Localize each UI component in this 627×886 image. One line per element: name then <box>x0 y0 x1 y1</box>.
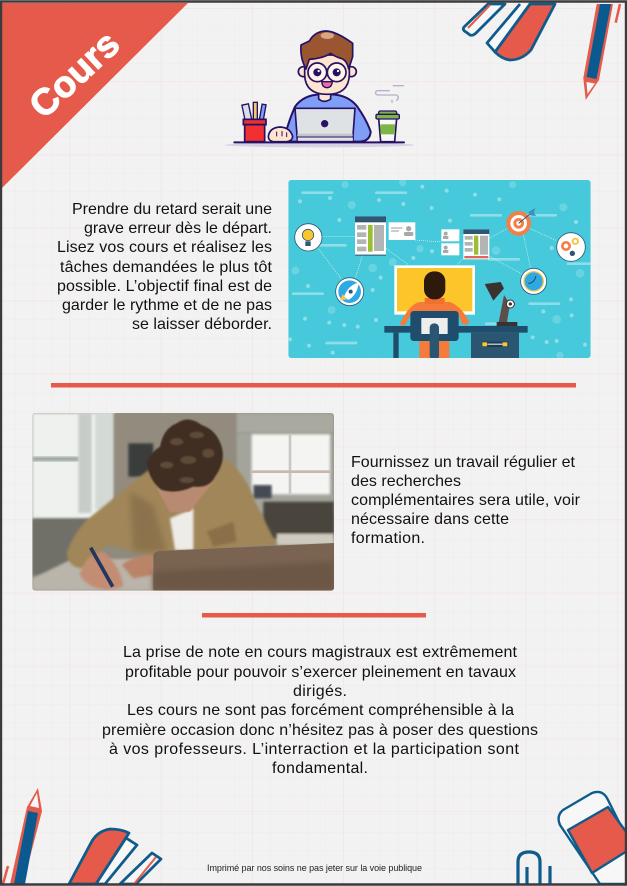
coffee <box>379 118 397 142</box>
shirt <box>170 508 193 550</box>
bulb node <box>295 224 322 251</box>
hand <box>268 127 293 142</box>
pen <box>91 548 113 587</box>
text: paragraph on keeping up: se laisser déborder. <box>132 316 272 333</box>
illustration: teal workstation network <box>288 179 591 360</box>
body <box>283 94 371 142</box>
network links <box>317 228 557 279</box>
illustration: paperclip bottom right <box>518 852 550 884</box>
illustration: books top right <box>463 4 555 60</box>
person head and shoulders <box>400 302 469 326</box>
illustration: eraser bottom right <box>559 792 627 884</box>
footer note: Imprimé par nos soins ne pas jeter sur la voie publique <box>207 863 422 873</box>
text: regular work paragraph: des recherches <box>351 473 461 490</box>
hair <box>147 420 223 492</box>
text: paragraph on keeping up: tâches demandées le plus tôt <box>60 259 273 276</box>
text: paragraph on keeping up: Prendre du retard serait une <box>72 201 272 218</box>
photo: student writing at desk <box>32 413 334 591</box>
text: paragraph on keeping up: possible. L’objectif final est de <box>57 278 272 295</box>
window right <box>463 229 489 259</box>
rocket node <box>336 278 364 306</box>
laptop <box>295 108 355 140</box>
sparkles <box>291 179 584 359</box>
ears <box>298 67 308 77</box>
text: note taking paragraph: première occasion donc n’hésitez pas à poser des questions <box>102 722 538 739</box>
mouth <box>322 82 332 88</box>
desk lamp <box>498 295 510 322</box>
clock node <box>521 268 547 294</box>
laptop back <box>153 543 334 591</box>
text: regular work paragraph <box>351 454 581 547</box>
hands <box>80 552 123 590</box>
text: paragraph on keeping up: garder le rythme et de ne pas <box>62 297 272 314</box>
text: note taking paragraph: fondamental. <box>272 760 368 777</box>
text: paragraph on keeping up: grave erreur dès le départ. <box>84 220 272 237</box>
illustration: pencil top right <box>583 4 620 100</box>
monitor <box>394 265 475 315</box>
text: paragraph on keeping up <box>57 201 273 333</box>
text: regular work paragraph: formation. <box>351 530 425 547</box>
heading: Cours: Cours <box>21 23 127 126</box>
face <box>157 480 215 512</box>
jacket <box>67 460 277 568</box>
legs and chair <box>419 341 430 358</box>
target node <box>506 211 531 236</box>
text: note taking paragraph: Les cours ne sont pas forcément compréhensible à la <box>127 702 514 719</box>
small dots <box>288 185 587 355</box>
text: note taking paragraph: La prise de note en cours magistraux est extrêmement <box>123 644 518 661</box>
divider: lower red rule <box>202 613 426 618</box>
window left <box>355 216 386 255</box>
steam <box>375 86 403 102</box>
desk <box>384 326 528 333</box>
text: note taking paragraph: à vos professeurs. L’interraction et la participation sont <box>109 741 520 758</box>
text: note taking paragraph <box>102 644 538 777</box>
dashes <box>292 191 591 344</box>
divider: upper red rule <box>51 383 576 388</box>
text: paragraph on keeping up: Lisez vos cours et réalisez les <box>57 239 272 256</box>
contact card <box>389 222 415 240</box>
gears node <box>557 233 585 261</box>
left window and wall <box>32 413 116 520</box>
pencil pot <box>242 104 252 121</box>
text: regular work paragraph: nécessaire dans cette <box>351 511 509 528</box>
text: note taking paragraph: dirigés. <box>293 683 347 700</box>
illustration: pencil bottom left <box>3 788 42 884</box>
banner: Cours corner ribbon <box>2 3 188 188</box>
glasses <box>308 63 327 82</box>
text: regular work paragraph: complémentaires sera utile, voir <box>351 492 581 509</box>
illustration: developer at laptop <box>224 31 414 147</box>
illustration: books bottom left <box>69 829 161 884</box>
text: note taking paragraph: profitable pour pouvoir s’exercer pleinement en tavaux <box>125 664 516 681</box>
face <box>305 55 349 94</box>
hair <box>301 31 353 69</box>
text: regular work paragraph: Fournissez un travail régulier et <box>351 454 576 471</box>
